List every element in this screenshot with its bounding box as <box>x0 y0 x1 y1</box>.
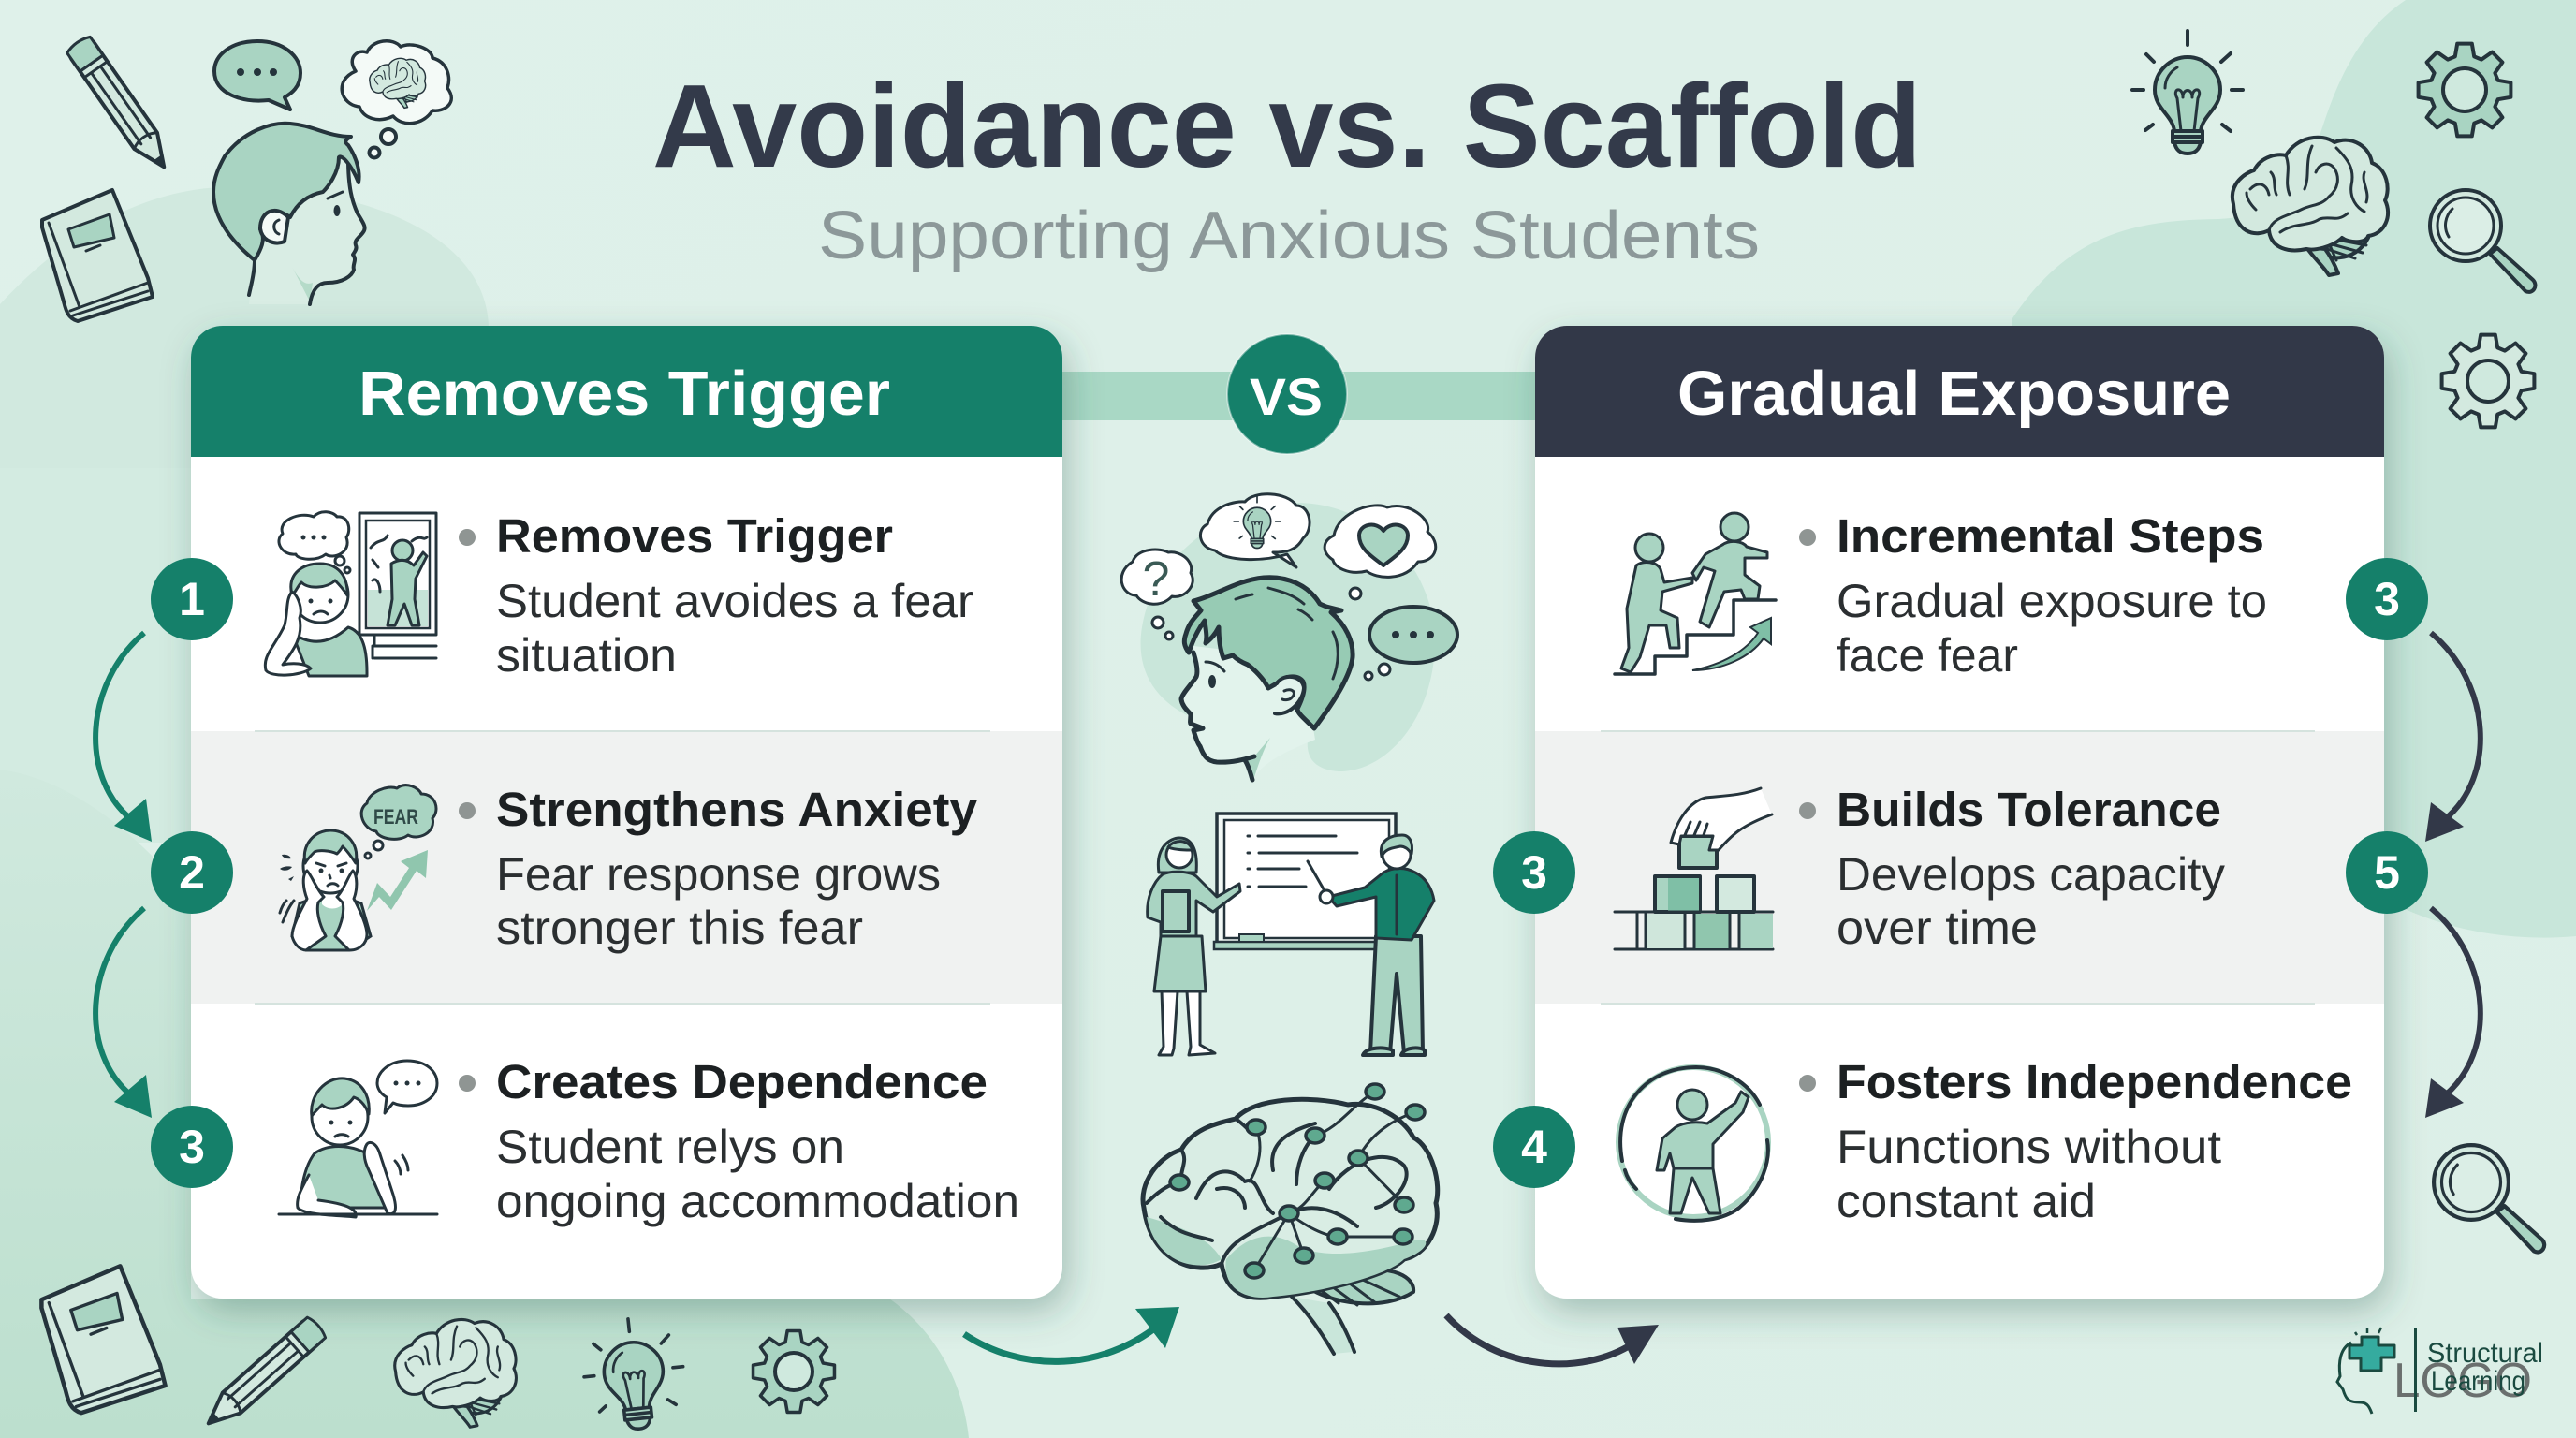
row: creates dependence text <box>459 1055 1019 1227</box>
connector bar with VS badge: VS <box>1250 367 1323 426</box>
icon: speech bubble top <box>214 41 300 110</box>
number badge: left 3: 3 <box>179 1121 205 1173</box>
row: creates dependence text: Creates Dependence <box>496 1055 988 1108</box>
icon: independent person in circle <box>1618 1067 1768 1221</box>
row: strengthens anxiety text: Fear response grows <box>496 848 941 901</box>
icon: book top left <box>42 190 153 321</box>
row: builds tolerance text: Develops capacity <box>1837 848 2225 901</box>
heading: right panel: Gradual Exposure <box>1677 359 2231 429</box>
row: builds tolerance text: over time <box>1837 902 2038 954</box>
number badge: mid 4: 4 <box>1521 1121 1547 1173</box>
icon: gear right <box>2442 335 2534 427</box>
man teacher <box>1320 835 1434 1055</box>
number badge: right 5: 5 <box>2374 846 2400 899</box>
row: creates dependence text: Student relys on <box>496 1121 844 1173</box>
arrow: bottom navy <box>1446 1315 1659 1364</box>
thought: heart <box>1325 506 1436 599</box>
icon: hand stacking blocks <box>1615 788 1773 949</box>
number badge: mid 3: 3 <box>1521 846 1547 899</box>
row: builds tolerance text: Builds Tolerance <box>1837 783 2221 836</box>
row: fosters independence text: constant aid <box>1837 1175 2096 1227</box>
row: removes trigger text: situation <box>496 629 677 682</box>
icon: lightbulb top right <box>2132 31 2243 154</box>
icon: brain top right <box>2232 138 2388 275</box>
panel: gradual exposure <box>1535 326 2384 1299</box>
heading: left panel: Removes Trigger <box>359 359 890 429</box>
number badge: left 1 <box>151 558 233 640</box>
number badge: right 3 <box>2346 558 2428 640</box>
arrow: bottom green <box>964 1307 1179 1361</box>
icon: brain bottom <box>395 1319 516 1427</box>
row: removes trigger text: Removes Trigger <box>496 509 893 563</box>
logo <box>2337 1328 2543 1414</box>
icon: student at door <box>265 512 436 676</box>
icon: thought cloud with brain <box>342 41 451 157</box>
arrow: right 3 to 5 <box>2425 633 2481 842</box>
row: creates dependence text: ongoing accommodation <box>496 1175 1019 1227</box>
woman teacher <box>1148 838 1240 1055</box>
row: strengthens anxiety text: stronger this fear <box>496 902 863 954</box>
row: removes trigger text: Student avoides a fear <box>496 575 973 627</box>
row: incremental steps text <box>1799 509 2267 682</box>
icon: worried student with rising arrow <box>280 785 436 950</box>
icon: pencil top left <box>66 35 175 175</box>
row: removes trigger text <box>459 509 973 682</box>
number badge: mid 3 <box>1493 831 1575 914</box>
row: fosters independence text: Fosters Independence <box>1837 1055 2352 1108</box>
connector bar with VS badge <box>1058 334 1540 454</box>
icon: lightbulb bottom <box>578 1313 689 1434</box>
row: incremental steps text: face fear <box>1837 629 2018 682</box>
title: Avoidance vs. Scaffold <box>652 60 1922 192</box>
arrow: left 1 to 2 <box>95 633 152 842</box>
thought: question: ? <box>1143 552 1169 607</box>
icon: student thinking at desk <box>279 1061 437 1217</box>
center illustration: thinking student <box>1121 494 1457 780</box>
number badge: left 1: 1 <box>179 573 205 625</box>
center illustration: connected brain <box>1143 1084 1438 1354</box>
row: strengthens anxiety text: Strengthens Anxiety <box>496 783 978 836</box>
row: builds tolerance text <box>1799 783 2225 954</box>
number badge: left 2 <box>151 831 233 914</box>
number badge: right 3: 3 <box>2374 573 2400 625</box>
row: incremental steps text: Gradual exposure to <box>1837 575 2267 627</box>
number badge: left 2: 2 <box>179 846 205 899</box>
icon: gear top right <box>2419 44 2510 136</box>
icon: climbing stairs <box>1615 513 1776 674</box>
icon: gear bottom <box>754 1331 834 1412</box>
row: strengthens anxiety text <box>459 783 978 954</box>
thought: lightbulb <box>1200 494 1310 567</box>
arrow: left 2 to 3 <box>95 908 152 1118</box>
icon: pencil bottom left <box>199 1315 328 1433</box>
speech: dots <box>1365 607 1457 680</box>
icon: book bottom left <box>41 1266 166 1413</box>
row: fosters independence text: Functions without <box>1837 1121 2221 1173</box>
row: incremental steps text: Incremental Steps <box>1837 509 2264 563</box>
neural nodes <box>1170 1084 1425 1278</box>
number badge: mid 4 <box>1493 1106 1575 1188</box>
icon: magnifier bottom right <box>2434 1145 2544 1252</box>
icon: magnifier top right <box>2430 190 2535 292</box>
number badge: left 3 <box>151 1106 233 1188</box>
logo: LOGO <box>2393 1354 2532 1408</box>
center illustration: teachers at whiteboard <box>1148 814 1434 1055</box>
thought: question <box>1121 550 1193 639</box>
icon: worried student with rising arrow: FEAR <box>373 805 418 829</box>
logo: Learning <box>2431 1366 2525 1397</box>
row: fosters independence text <box>1799 1055 2352 1227</box>
panel: removes trigger <box>191 326 1062 1299</box>
logo: Structural <box>2427 1338 2543 1369</box>
subtitle: Supporting Anxious Students <box>818 198 1760 273</box>
icon: student head profile <box>213 124 365 304</box>
arrow: right 5 onward <box>2425 908 2481 1118</box>
number badge: right 5 <box>2346 831 2428 914</box>
